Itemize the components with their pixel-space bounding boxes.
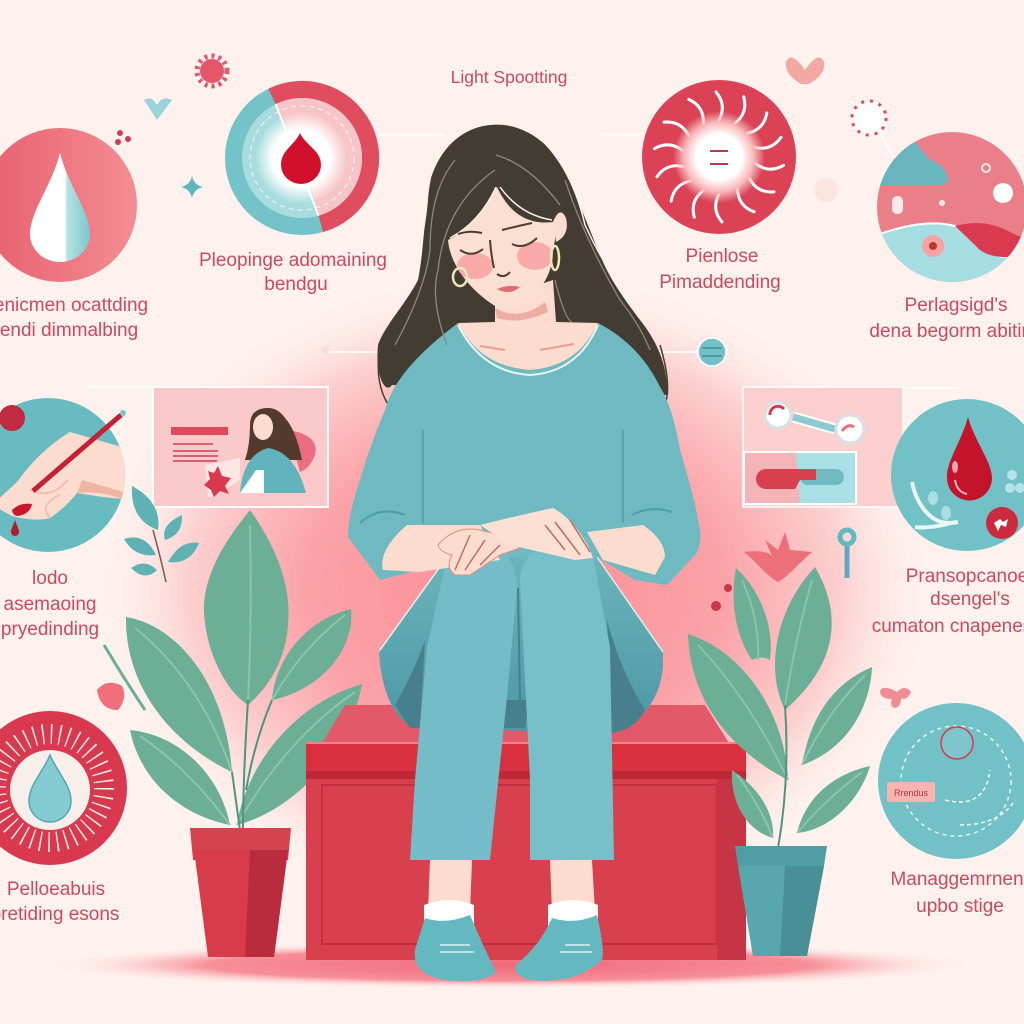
caption: left middle [1, 568, 99, 640]
panel: landscape icon [877, 132, 1024, 282]
panel: diagram icon bottom right: Rrendus [894, 788, 929, 798]
caption: left middle: asemaoing [4, 594, 96, 615]
caption: bottom right [890, 869, 1024, 917]
flower decor left [97, 645, 145, 710]
ground shadow [45, 941, 975, 989]
panel: sun icon [642, 80, 796, 234]
caption: left-center: Pleopinge adomaining [199, 250, 387, 271]
caption: left-center [199, 250, 387, 295]
decor: small teal branch [124, 486, 199, 582]
panel: hand with pen icon [0, 398, 126, 552]
ankles [428, 860, 595, 912]
earrings [453, 268, 467, 286]
panel: blood drop icon right [891, 399, 1024, 551]
hair strands [395, 155, 650, 350]
hair back [377, 125, 667, 395]
caption: right middle: dsengel's [930, 589, 1010, 610]
hands [438, 529, 520, 575]
shoes [415, 915, 496, 981]
caption: far right upper: Perlagsigd's [905, 295, 1007, 316]
title: light spotting: Light Spootting [451, 67, 567, 87]
neck and chest [458, 280, 598, 370]
caption: bottom right: upbo stige [916, 896, 1004, 917]
plant: left [126, 510, 362, 957]
caption: bottom left: Pelloeabuis [7, 879, 105, 900]
legs [410, 549, 517, 860]
caption: right-center [659, 246, 781, 293]
decor: small icons [115, 56, 911, 708]
panel: woman illustration card [153, 387, 328, 507]
caption: left middle: pryedinding [1, 619, 99, 640]
cheeks [457, 253, 493, 279]
caption: right-center: Pimaddending [659, 272, 781, 293]
eyes, brows, nose, mouth [458, 223, 537, 276]
plant: right [688, 567, 872, 956]
panel: diagram icon bottom right [878, 703, 1024, 859]
panel: sun drop icon bottom left [0, 711, 127, 865]
caption: left middle: lodo [32, 568, 68, 589]
caption: bottom left [0, 879, 119, 925]
neckline [458, 325, 598, 375]
torso and sleeves [348, 323, 700, 585]
caption: top left: endi dimmalbing [0, 320, 138, 341]
caption: top left [0, 295, 148, 341]
face [448, 187, 555, 309]
lower body [379, 557, 663, 733]
arms [382, 525, 665, 575]
panel: connector card [743, 387, 903, 507]
panel: blood ring icon [225, 81, 379, 235]
box seat [306, 705, 746, 960]
flower decor right [711, 530, 854, 611]
woman [348, 125, 700, 981]
panel: drop icon top left [0, 128, 137, 282]
caption: right-center: Pienlose [686, 246, 758, 267]
decor: connector lines [90, 135, 960, 388]
ear [553, 212, 567, 242]
caption: right middle [872, 566, 1024, 637]
caption: left-center: bendgu [264, 274, 328, 295]
caption: far right upper [869, 295, 1024, 342]
caption: bottom right: Managgemrnen [890, 869, 1024, 890]
